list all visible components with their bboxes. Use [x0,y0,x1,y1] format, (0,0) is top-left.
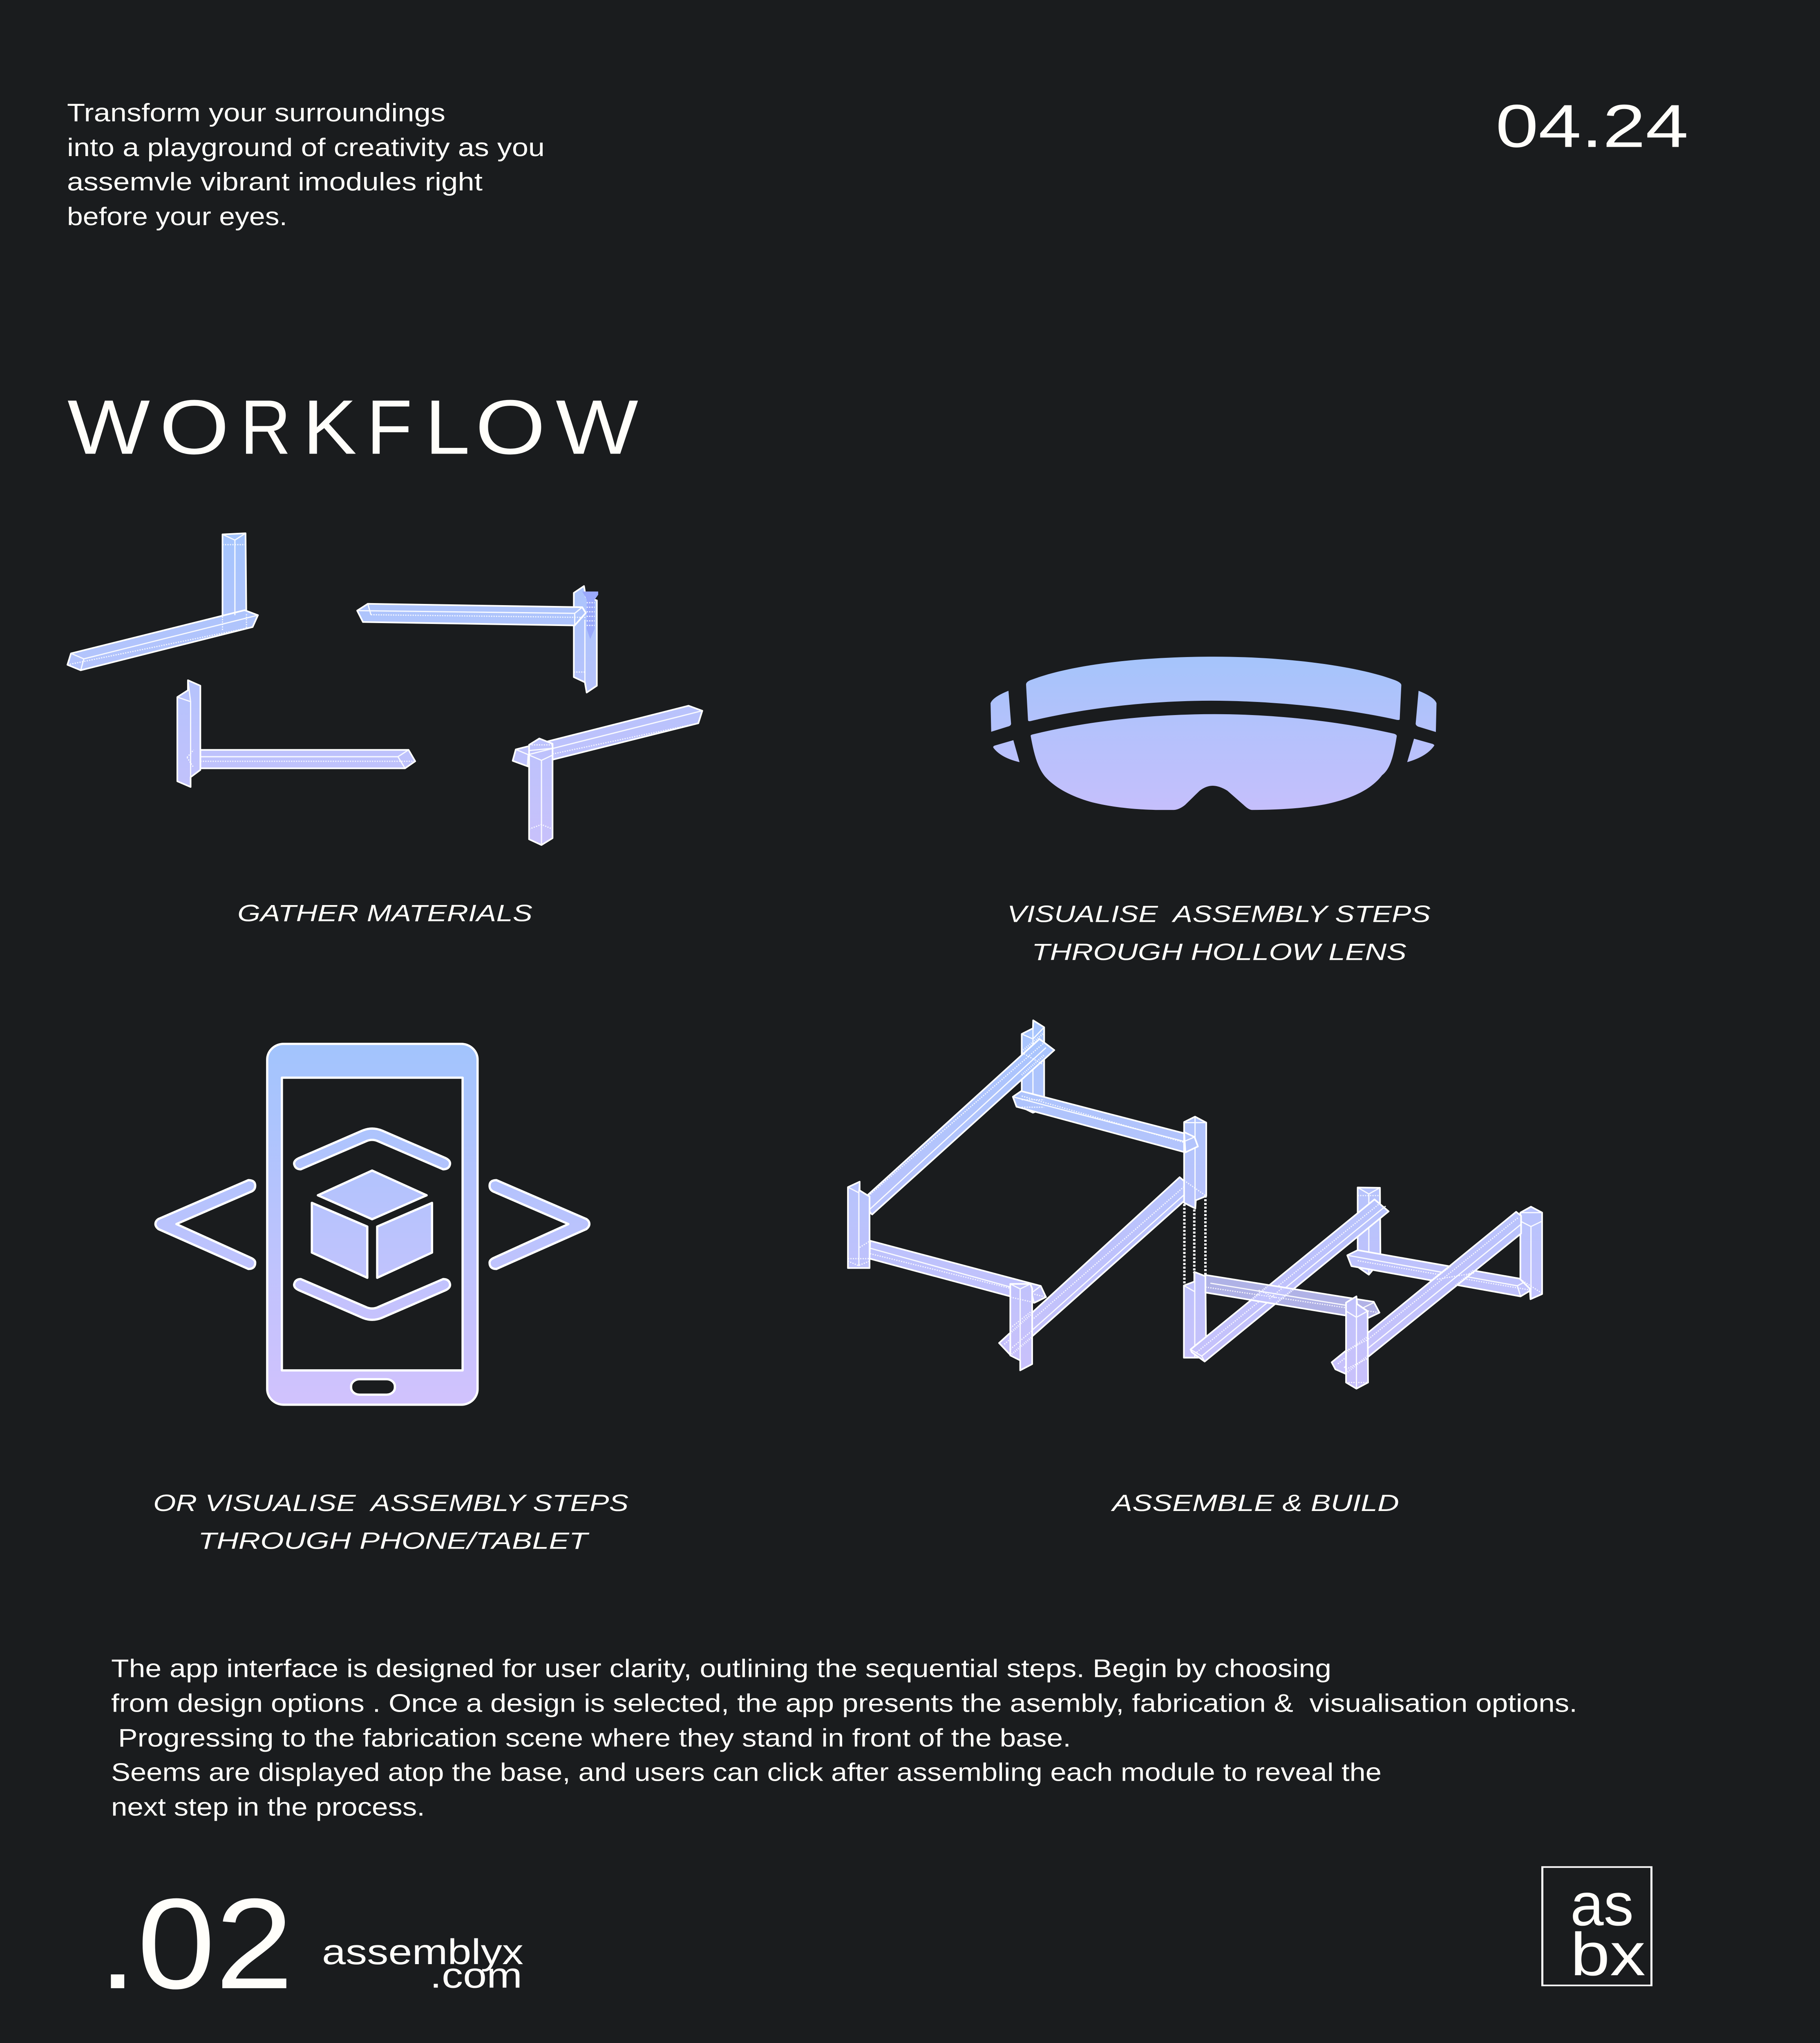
arrow: dotted alignment guides [1184,1196,1205,1285]
caption: visualise through hollow lens: THROUGH HOLLOW LENS [1032,939,1406,965]
title: workflow: F [367,384,412,470]
home button [351,1379,395,1395]
intro text [67,98,545,230]
side straps [990,691,1436,762]
caption: visualise through hollow lens: VISUALISE ASSEMBLY STEPS [1007,901,1431,927]
date: 04.24 [1496,92,1688,160]
logo: bx [1570,1920,1646,1988]
arrow: up chevron [294,1129,450,1169]
intro text: into a playground of creativity as you [67,133,545,161]
caption: phone or tablet: THROUGH PHONE/TABLET [198,1527,590,1554]
logo [1542,1867,1652,1988]
logo: as [1570,1870,1634,1938]
frame: lower module [1184,1187,1542,1389]
intro text: Transform your surroundings [67,98,445,127]
module: top-right joint with screw [357,586,598,693]
arrow: down chevron [294,1279,450,1320]
module: top-left joint [67,533,258,670]
icon: phone with cube [155,1044,589,1405]
caption: phone or tablet: OR VISUALISE ASSEMBLY STEPS [153,1490,628,1516]
frame: upper module [848,1020,1206,1370]
body paragraph [111,1654,1577,1821]
icon: assembled frame [848,1020,1542,1389]
intro text: before your eyes. [67,202,287,230]
title: workflow: L [425,384,470,470]
body paragraph: Progressing to the fabrication scene where they stand in front of the base. [118,1723,1071,1752]
phone screen [282,1078,463,1370]
title: workflow: W [556,384,638,470]
phone body [267,1044,478,1405]
caption: phone or tablet [153,1490,628,1554]
body paragraph: The app interface is designed for user clarity, outlining the sequential steps. Begin by choosing [111,1654,1331,1683]
title: workflow: O [475,384,546,470]
site name: assemblyx [322,1932,523,1972]
caption: assemble and build: ASSEMBLE & BUILD [1110,1490,1399,1516]
title: workflow: K [303,384,357,470]
icon: screw [582,592,598,639]
module: lower-right joint [513,706,702,845]
title: workflow: O [159,384,229,470]
body paragraph: next step in the process. [111,1793,425,1821]
title: workflow: R [240,384,291,470]
arrow: right chevron [490,1180,589,1269]
caption: gather materials: GATHER MATERIALS [237,900,532,926]
body paragraph: from design options . Once a design is selected, the app presents the asembly, fabrication & visualisation options. [111,1689,1577,1717]
icon: cube [312,1171,432,1278]
intro text: assemvle vibrant imodules right [67,168,483,196]
title: workflow: W [67,384,150,470]
body paragraph: Seems are displayed atop the base, and users can click after assembling each module to reveal the [111,1758,1382,1786]
arrow: left chevron [155,1180,255,1269]
site name [322,1932,523,1996]
icon: headset goggles [990,657,1436,810]
module: lower-left joint [177,680,415,787]
caption: visualise through hollow lens [1007,901,1431,965]
visor lens [1031,714,1397,810]
page number: .02 [98,1872,293,2016]
icon: timber joint modules [67,533,702,845]
site name: .com [430,1956,522,1996]
visor top band [1026,657,1401,721]
